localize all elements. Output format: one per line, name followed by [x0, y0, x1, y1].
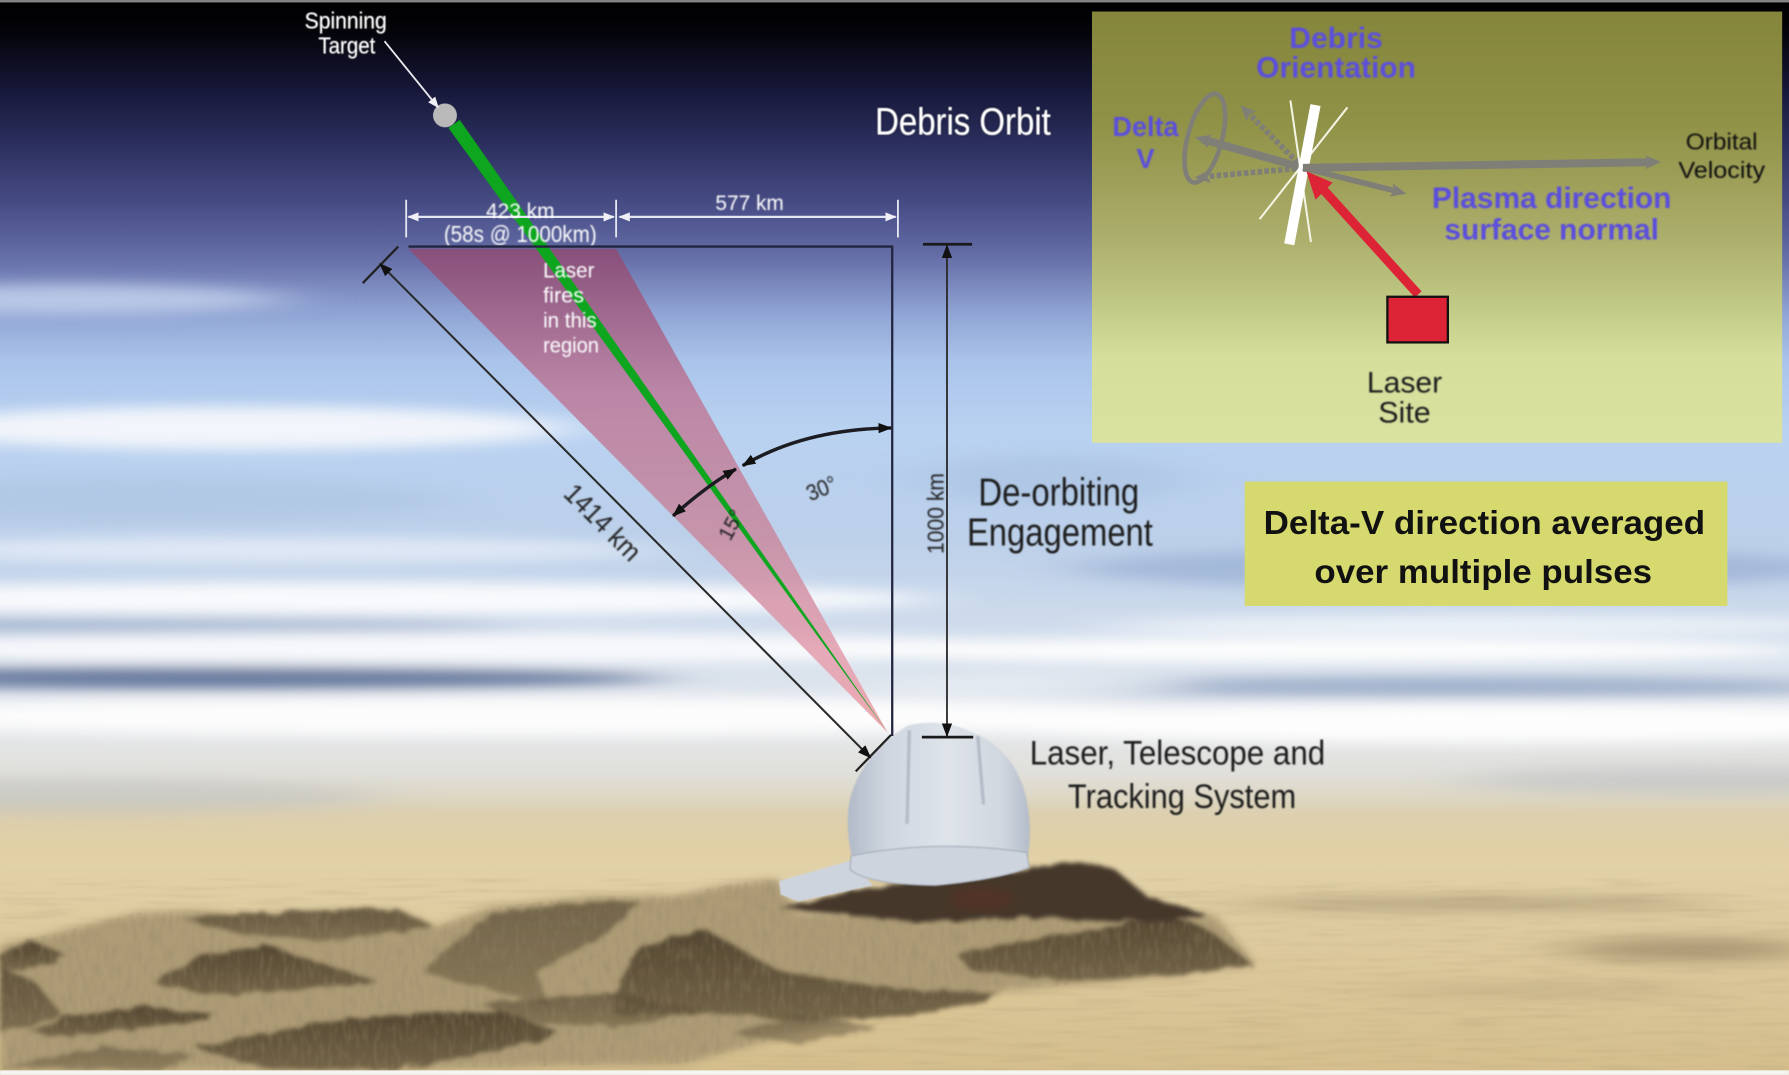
label: delta v — [1112, 111, 1179, 174]
label: orbital velocity: Velocity — [1678, 157, 1766, 183]
dome base ring — [850, 846, 1029, 885]
panel: debris orientation inset — [1092, 12, 1782, 443]
label: orbital velocity — [1678, 129, 1766, 183]
callout: delta-v direction — [1245, 482, 1727, 606]
label: debris orbit: Debris Orbit — [875, 101, 1051, 143]
green tracking beam — [448, 120, 888, 733]
label: delta v: V — [1136, 143, 1155, 174]
arc: 15 degrees: 15° — [712, 505, 749, 544]
label: de-orbiting engagement: Engagement — [967, 511, 1153, 554]
label: spinning target — [305, 8, 387, 59]
desert ground — [0, 799, 1789, 1075]
arc: 30 degrees: 30° — [802, 471, 841, 506]
label: plasma direction surface normal: Plasma direction — [1432, 182, 1671, 215]
label: laser fires in this region: in this — [543, 308, 597, 333]
debris plate orientations — [1260, 101, 1347, 244]
label: orbital velocity: Orbital — [1686, 129, 1758, 155]
label: delta v: Delta — [1112, 111, 1179, 142]
dimension: 1414 km slant range: 1414 km — [558, 478, 648, 567]
arrow: orbital velocity — [1303, 162, 1653, 168]
dimension: 1000 km altitude — [922, 244, 973, 737]
label: laser site: Site — [1378, 396, 1431, 429]
dimension: 423 km: 423 km — [486, 198, 554, 223]
arrow: target pointer — [384, 41, 438, 107]
label: spinning target: Target — [318, 33, 376, 59]
label: laser, telescope and tracking system: Tracking System — [1068, 778, 1296, 816]
label: plasma direction surface normal — [1432, 182, 1671, 247]
observatory rock mound — [778, 862, 1209, 922]
dome shell — [848, 723, 1030, 870]
mountain terrain — [0, 879, 1789, 1075]
label: laser, telescope and tracking system: Laser, Telescope and — [1030, 735, 1325, 773]
label: debris orientation: Orientation — [1256, 52, 1416, 85]
label: laser fires in this region: Laser — [543, 257, 594, 282]
label: spinning target: Spinning — [305, 8, 387, 34]
arrow: plasma direction — [1303, 168, 1399, 192]
label: debris orientation: Debris — [1289, 22, 1383, 55]
label: plasma direction surface normal: surface normal — [1444, 214, 1659, 247]
observatory dome — [779, 723, 1030, 901]
laser engagement wedge — [408, 249, 888, 733]
label: laser fires in this region: fires — [543, 282, 584, 307]
dome slit — [907, 730, 983, 824]
dimension: 577 km: 577 km — [715, 190, 784, 215]
arrow: laser beam — [1306, 171, 1418, 294]
label: de-orbiting engagement: De-orbiting — [978, 472, 1139, 515]
callout: delta-v direction: over multiple pulses — [1314, 554, 1652, 591]
dimension: 423 km — [406, 198, 616, 247]
label: laser fires in this region — [543, 257, 599, 358]
dome annex building — [779, 860, 873, 901]
label: laser site — [1367, 367, 1442, 429]
label: debris orientation — [1256, 22, 1416, 85]
spinning target: debris sphere — [433, 103, 457, 127]
callout: delta-v direction: Delta-V direction averaged — [1264, 505, 1705, 542]
dimension: 1414 km slant range — [363, 247, 891, 771]
label: de-orbiting engagement — [967, 472, 1153, 554]
delta-v precession cone — [1176, 90, 1303, 187]
label: laser fires in this region: region — [543, 333, 599, 358]
arc: 15 degrees — [673, 469, 749, 544]
laser site marker — [1387, 297, 1448, 342]
right-angle guide lines — [408, 247, 892, 736]
dimension: 1000 km altitude: 1000 km — [923, 473, 949, 554]
label: laser site: Laser — [1367, 367, 1442, 400]
label: laser, telescope and tracking system — [1030, 735, 1325, 816]
dimension: 423 km: (58s @ 1000km) — [444, 221, 597, 247]
arc: 30 degrees — [743, 428, 891, 506]
